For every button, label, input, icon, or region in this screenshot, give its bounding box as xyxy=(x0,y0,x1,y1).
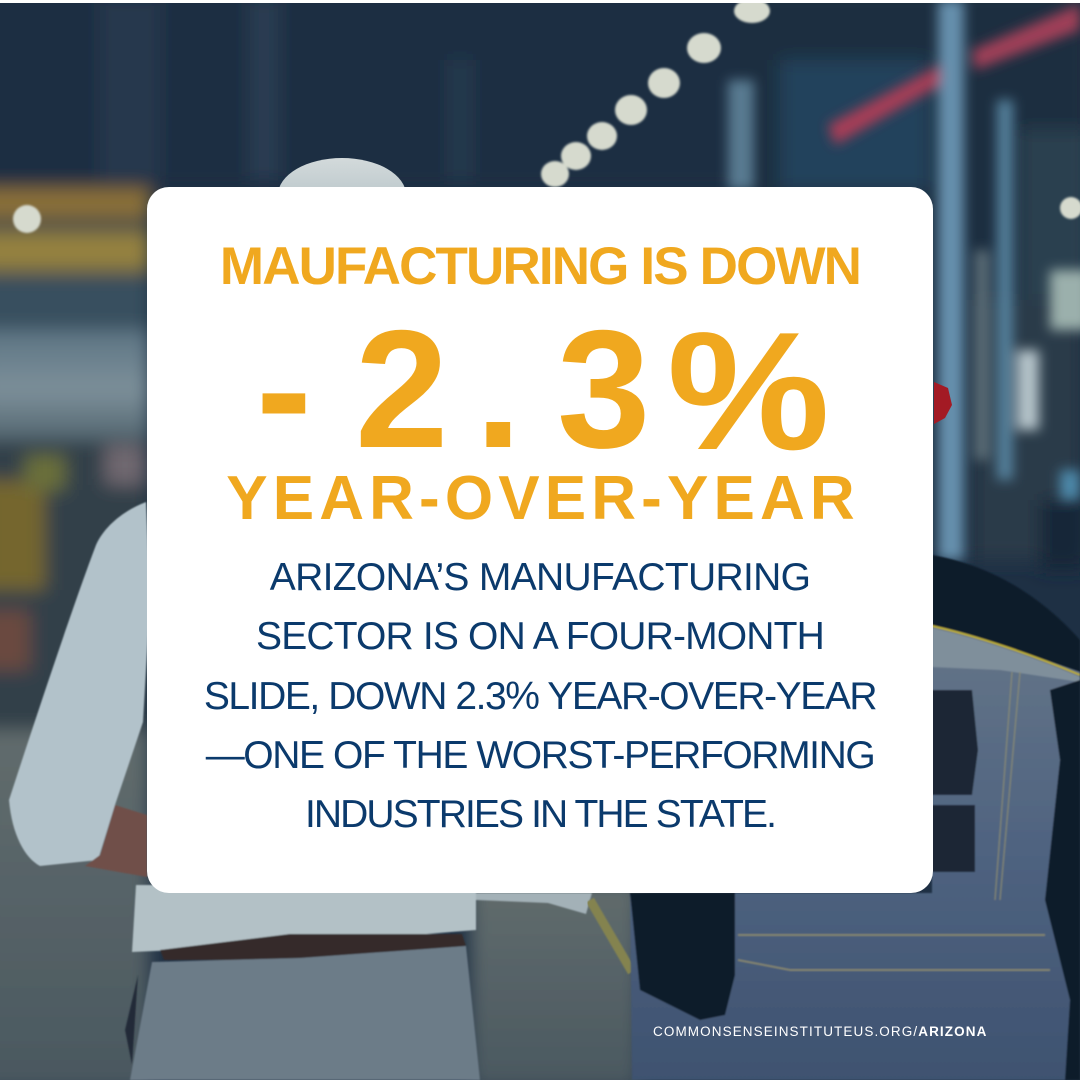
icon: red ear protection xyxy=(934,382,952,424)
body text: —ONE OF THE WORST-PERFORMING xyxy=(206,734,874,777)
worker left: shirt and trousers xyxy=(9,502,592,1080)
big number: -2.3%: % xyxy=(667,297,830,485)
body text: SECTOR IS ON A FOUR-MONTH xyxy=(256,615,824,658)
subheading: year-over-year: YEAR-OVER-YEAR xyxy=(226,464,860,533)
icon: ceiling lights xyxy=(13,0,1080,233)
big number: -2.3% xyxy=(256,295,830,485)
body text xyxy=(204,556,876,836)
body text: SLIDE, DOWN 2.3% YEAR-OVER-YEAR xyxy=(204,674,876,718)
worker right: work jacket xyxy=(630,555,1080,1080)
panel: white card xyxy=(147,187,933,893)
floor yellow line xyxy=(590,900,632,972)
big number: -2.3%: 2 xyxy=(355,295,448,483)
big number: -2.3%: . xyxy=(475,295,522,483)
big number: -2.3%: 3 xyxy=(557,295,650,483)
big number: -2.3%: - xyxy=(256,295,312,483)
body text: INDUSTRIES IN THE STATE. xyxy=(305,793,775,836)
body text: ARIZONA’S MANUFACTURING xyxy=(270,556,810,599)
worker left: hard hat xyxy=(278,158,406,232)
heading: manufacturing is down: MAUFACTURING IS DOWN xyxy=(220,237,860,296)
footer url: COMMONSENSEINSTITUTEUS.ORG/ARIZONA xyxy=(653,1024,987,1039)
